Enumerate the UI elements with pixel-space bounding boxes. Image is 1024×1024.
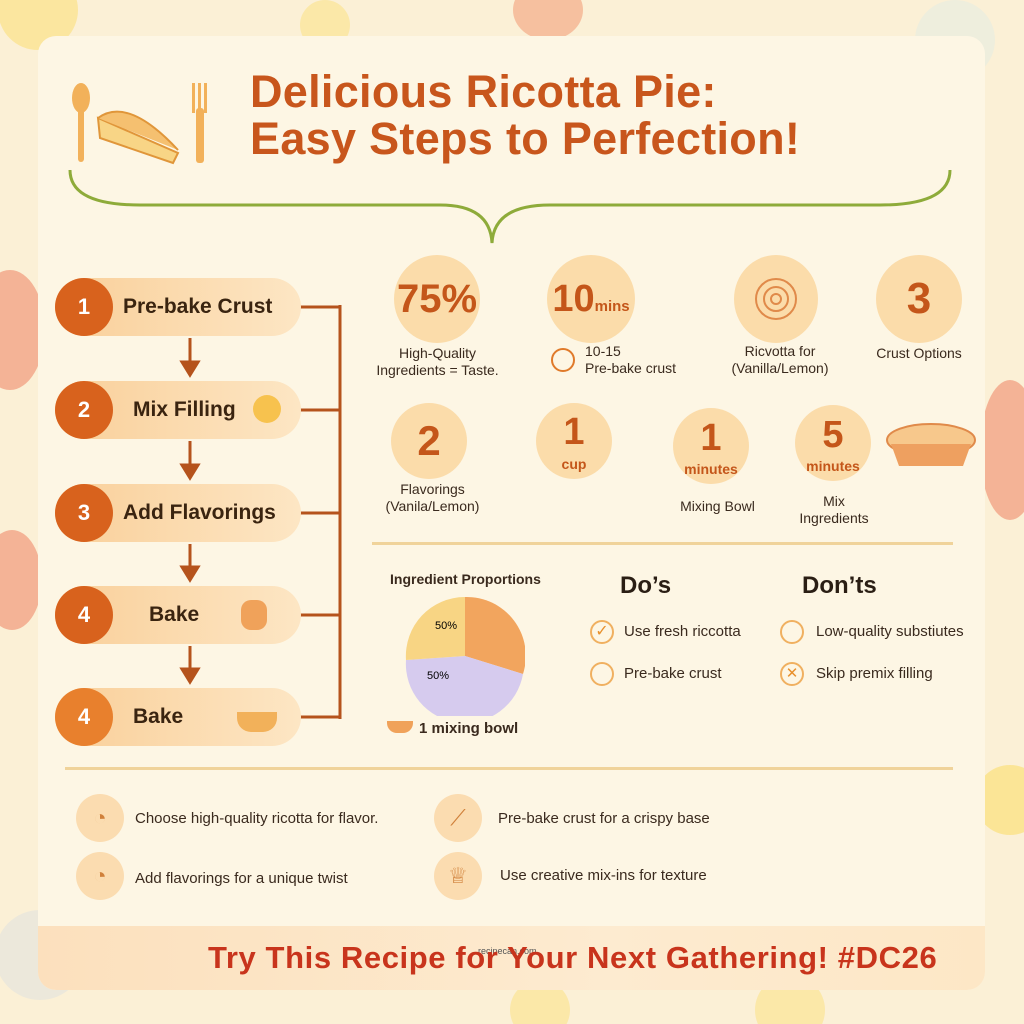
step 4: Bake bbox=[149, 603, 199, 626]
stat: 1 minutes mixing bowl bbox=[673, 408, 755, 514]
stat: 1 minutes mixing bowl: Mixing Bowl bbox=[680, 498, 755, 514]
stat: ricotta swirl: (Vanilla/Lemon) bbox=[731, 360, 828, 376]
stat: 5 minutes mix ingredients: Mix bbox=[823, 493, 845, 509]
stat: 5 minutes mix ingredients: Ingredients bbox=[799, 510, 869, 526]
do's: Use fresh riccotta bbox=[624, 623, 741, 640]
stat: 10-15 mins bbox=[547, 255, 676, 376]
pie chart: ingredient proportions: Ingredient Proportions bbox=[390, 571, 541, 587]
don'ts bbox=[780, 572, 964, 686]
tips: ♕ bbox=[448, 863, 468, 888]
stat: 75%: High-Quality bbox=[399, 345, 476, 361]
stat: 10-15 mins: Pre-bake crust bbox=[585, 360, 676, 376]
tips: ◔ bbox=[93, 863, 107, 888]
footer banner: Try This Recipe for Your Next Gathering! #DC26 bbox=[208, 940, 937, 975]
stat: 1 cup: 1 bbox=[563, 411, 585, 453]
stat: 5 minutes mix ingredients: 5 bbox=[822, 414, 844, 456]
step 1: Pre-bake Crust bbox=[123, 295, 272, 318]
step 2 bbox=[55, 381, 301, 439]
tips: Add flavorings for a unique twist bbox=[135, 870, 348, 887]
stat: 75% bbox=[376, 255, 499, 378]
step 3: Add Flavorings bbox=[123, 501, 276, 524]
tips: Use creative mix-ins for texture bbox=[500, 867, 707, 884]
tips: ◔ bbox=[93, 805, 107, 830]
step 4: 4 bbox=[78, 602, 90, 627]
stat: 5 minutes mix ingredients: minutes bbox=[806, 458, 860, 474]
stat: 10-15 mins: 10-15 bbox=[585, 343, 621, 359]
step 5: 4 bbox=[78, 704, 90, 729]
stat: 1 minutes mixing bowl: minutes bbox=[684, 461, 738, 477]
step 1 bbox=[55, 278, 301, 336]
title: Easy Steps to Perfection! bbox=[250, 113, 800, 164]
step 2: 2 bbox=[78, 397, 90, 422]
do's: Pre-bake crust bbox=[624, 665, 722, 682]
do's bbox=[590, 572, 741, 686]
footer banner: recipecan.com bbox=[478, 946, 537, 956]
step 5: Bake bbox=[133, 705, 183, 728]
step 1: 1 bbox=[78, 294, 90, 319]
step 2: Mix Filling bbox=[133, 398, 236, 421]
stat: 1 cup bbox=[536, 403, 612, 479]
tips: ⟋ bbox=[450, 805, 466, 830]
step 4 bbox=[55, 586, 301, 644]
steps flow bbox=[179, 305, 342, 719]
stat: 3 crust options bbox=[876, 255, 962, 361]
stat: 2 flavorings bbox=[386, 403, 479, 514]
pie chart: ingredient proportions: 50% bbox=[427, 670, 449, 682]
pie chart: ingredient proportions bbox=[387, 571, 541, 737]
stat: 2 flavorings: 2 bbox=[417, 417, 441, 464]
stat: 10-15 mins: 10mins bbox=[552, 278, 630, 320]
step 3: 3 bbox=[78, 500, 90, 525]
stat: 2 flavorings: Flavorings bbox=[400, 481, 465, 497]
stat: ricotta swirl: Ricvotta for bbox=[745, 343, 815, 359]
icon: pie bbox=[886, 423, 976, 466]
stat: ricotta swirl bbox=[731, 255, 828, 376]
tips: Pre-bake crust for a crispy base bbox=[498, 810, 710, 827]
step 3 bbox=[55, 484, 301, 542]
stat: 2 flavorings: (Vanila/Lemon) bbox=[386, 498, 479, 514]
stat: 1 minutes mixing bowl: 1 bbox=[700, 417, 722, 459]
header icons: spoon, pie slice, fork bbox=[72, 83, 207, 164]
title bbox=[250, 66, 800, 164]
stat: 3 crust options: Crust Options bbox=[876, 345, 962, 361]
stat: 5 minutes mix ingredients bbox=[795, 405, 871, 526]
title: Delicious Ricotta Pie: bbox=[250, 66, 717, 117]
footer banner bbox=[38, 926, 985, 990]
stat: 1 cup: cup bbox=[562, 456, 586, 472]
do's: Do’s bbox=[620, 572, 671, 599]
don'ts: Don’ts bbox=[802, 572, 877, 599]
do's: ✓ bbox=[595, 623, 609, 640]
don'ts: Low-quality substiutes bbox=[816, 623, 964, 640]
stat: 75%: 75% bbox=[397, 277, 477, 321]
decorative brace bbox=[68, 170, 952, 244]
stat: 3 crust options: 3 bbox=[907, 274, 931, 323]
don'ts: Skip premix filling bbox=[816, 665, 933, 682]
tips bbox=[76, 794, 710, 900]
step 5 bbox=[55, 688, 301, 746]
pie chart: ingredient proportions: 1 mixing bowl bbox=[419, 720, 518, 737]
stat: 75%: Ingredients = Taste. bbox=[376, 362, 499, 378]
don'ts: ✕ bbox=[786, 665, 798, 682]
pie chart: ingredient proportions: 50% bbox=[435, 620, 457, 632]
tips: Choose high-quality ricotta for flavor. bbox=[135, 810, 378, 827]
